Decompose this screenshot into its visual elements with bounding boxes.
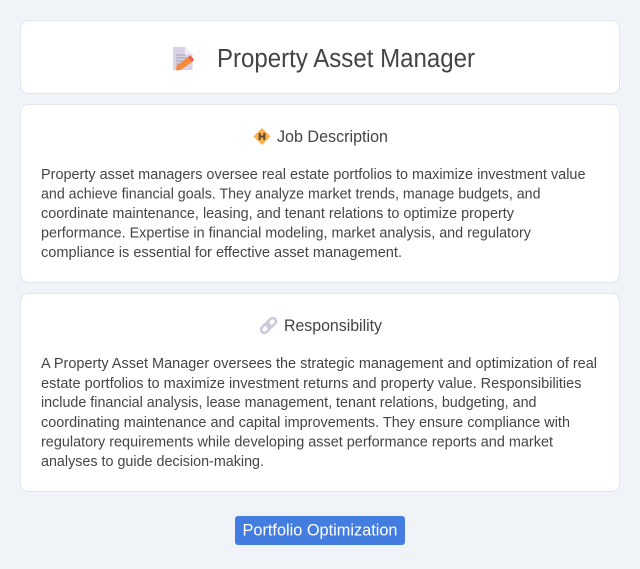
text block: job description: compliance is essential for effective asset management. bbox=[41, 245, 402, 261]
text block: job description: Property asset managers oversee real estate portfolios to maximize investment value bbox=[41, 167, 586, 183]
panel: responsibility bbox=[20, 294, 620, 492]
button: portfolio optimization bbox=[235, 516, 405, 545]
icon: chain link bbox=[260, 317, 277, 334]
text block: job description: and achieve financial goals. They analyze market trends, manage budgets, and bbox=[41, 186, 540, 202]
text block: job description: coordinate maintenance, leasing, and tenant relations to optimize property bbox=[41, 206, 515, 222]
text block: responsibility: estate portfolios to maximize investment returns and property value. Responsibilities bbox=[41, 376, 582, 392]
title: Property Asset Manager bbox=[217, 45, 475, 73]
text block: responsibility: analyses to guide decision-making. bbox=[41, 454, 264, 470]
panel: job description bbox=[20, 104, 620, 282]
icon: document with pencil bbox=[173, 47, 194, 70]
text block: responsibility bbox=[41, 356, 597, 470]
heading: job description: Job Description bbox=[277, 128, 388, 146]
icon: diamond road sign bbox=[254, 129, 270, 144]
button: portfolio optimization: Portfolio Optimization bbox=[242, 522, 398, 540]
text block: responsibility: regulatory requirements while developing asset performance reports and market bbox=[41, 434, 553, 450]
text block: responsibility: include financial analysis, lease management, tenant relations, budgeting, and bbox=[41, 395, 536, 411]
text block: responsibility: coordinating maintenance and capital improvements. They ensure compliance with bbox=[41, 415, 570, 431]
text block: responsibility: A Property Asset Manager oversees the strategic management and optimization of real bbox=[41, 356, 597, 372]
heading: responsibility: Responsibility bbox=[284, 317, 383, 335]
panel: title header bbox=[20, 20, 620, 94]
text block: job description bbox=[41, 167, 586, 261]
text block: job description: performance. Expertise in financial modeling, market analysis, and regulatory bbox=[41, 226, 532, 242]
